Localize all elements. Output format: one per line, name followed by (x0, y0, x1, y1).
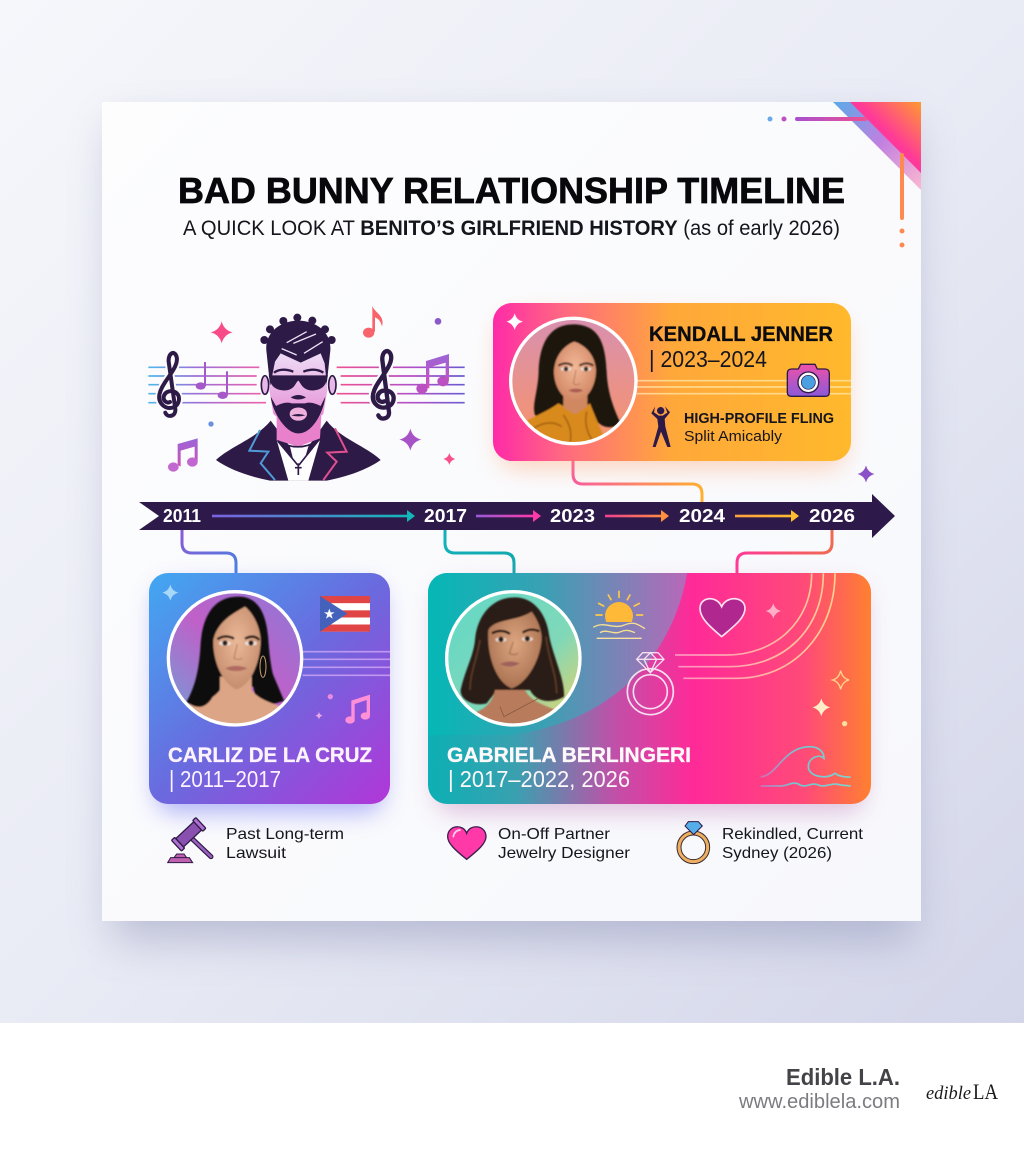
arrow 2023 to 2024 (605, 510, 669, 522)
main white panel (102, 102, 921, 921)
caption: Gabriela partner: Jewelry Designer (498, 845, 631, 862)
connector: 2026 to Gabriela (737, 530, 832, 573)
right treble clef (373, 351, 394, 419)
note: split: Split Amicably (684, 428, 783, 445)
portrait: Gabriela (448, 593, 578, 724)
title: BAD BUNNY RELATIONSHIP TIMELINE (178, 170, 845, 211)
double note heads lower left (168, 457, 198, 472)
nose (291, 395, 306, 399)
footer logo (926, 1079, 998, 1104)
connector: 2023 to Kendall (573, 461, 702, 502)
right music staff (337, 367, 465, 403)
panel: Gabriela Berlingeri (427, 572, 871, 862)
left treble clef (159, 353, 179, 416)
dates: Carliz: | 2011–2017 (169, 766, 281, 792)
sunglasses (269, 375, 328, 390)
icon: heart (700, 599, 745, 637)
year 2023: 2023 (550, 506, 595, 526)
note: fling: HIGH-PROFILE FLING (684, 411, 834, 427)
red note (372, 306, 383, 332)
dates: Gabriela: | 2017–2022, 2026 (448, 766, 630, 792)
caption: Gabriela partner: On-Off Partner (498, 826, 611, 843)
illustration: Benito portrait with music staves (148, 306, 465, 481)
dates: Kendall: | 2023–2024 (649, 346, 767, 372)
caption: Carliz: Lawsuit (226, 845, 287, 862)
decorative lines (637, 381, 851, 394)
timeline arrow (139, 494, 895, 538)
portrait ring (447, 592, 580, 725)
sparkle (506, 313, 523, 330)
mouth (290, 407, 307, 421)
caption: Carliz (226, 826, 344, 862)
connector: 2017 to Gabriela (445, 530, 514, 573)
caption: Gabriela current (722, 826, 864, 862)
sparkle (162, 585, 178, 601)
year 2011: 2011 (163, 506, 201, 526)
small decorations (315, 694, 333, 719)
card shadow (112, 125, 912, 940)
double note lower left (178, 438, 198, 467)
year 2017: 2017 (424, 506, 467, 526)
sparkle right of Kendall card (858, 466, 874, 482)
subtitle: A QUICK LOOK AT BENITO’S GIRLFRIEND HISTORY (as of early 2026) (183, 217, 840, 240)
caption: Carliz: Past Long-term (226, 826, 344, 843)
red note head (363, 328, 374, 338)
double note heads right (416, 376, 449, 394)
necklace (277, 440, 319, 475)
icon: heart small (448, 827, 486, 859)
face (269, 353, 327, 434)
lapel right (323, 428, 347, 480)
corner decoration (768, 102, 921, 248)
beard (271, 397, 325, 433)
footer logo: LA (973, 1079, 998, 1104)
double note right (426, 354, 449, 388)
icon: camera (787, 364, 829, 396)
caption: Gabriela partner (498, 826, 631, 862)
hair (266, 321, 330, 385)
sparkles (766, 603, 849, 726)
hair highlights (282, 332, 323, 355)
icon: ring (627, 653, 673, 715)
footer credit (738, 1064, 900, 1113)
portrait ring (168, 592, 302, 725)
year 2024: 2024 (679, 506, 725, 526)
moustache (287, 405, 309, 416)
name: Carliz: CARLIZ DE LA CRUZ (168, 744, 372, 767)
lapels (249, 430, 275, 480)
arrow 2011 to 2017 (212, 510, 415, 522)
neck (277, 410, 322, 447)
icon: Puerto Rico flag (320, 596, 370, 632)
jacket (216, 421, 381, 481)
connector: 2011 to Carliz (182, 530, 236, 573)
icon: gavel (168, 818, 211, 863)
caption: Gabriela current: Rekindled, Current (722, 826, 864, 843)
ears (261, 376, 336, 394)
staff notes (196, 362, 228, 399)
icon: sunset (593, 591, 645, 638)
icon: wave (761, 747, 851, 786)
footer strip (0, 1023, 1024, 1154)
portrait: Carliz (170, 593, 300, 724)
decorative curves (675, 573, 835, 678)
panel: Carliz de la Cruz (149, 573, 390, 863)
footer credit: Edible L.A. (786, 1064, 900, 1090)
hair twists (260, 314, 336, 344)
panel: Kendall Jenner (493, 303, 851, 469)
sparkles (208, 318, 455, 465)
eyebrows (274, 370, 323, 373)
arrow 2017 to 2023 (476, 510, 541, 522)
icon: diamond ring (679, 822, 708, 862)
decorative lines (303, 652, 390, 675)
icon: dancing figure (651, 406, 671, 447)
shirt (277, 440, 320, 481)
icon: music note (345, 695, 370, 724)
year 2026: 2026 (809, 506, 855, 526)
caption: Gabriela current: Sydney (2026) (722, 845, 832, 862)
arrow 2024 to 2026 (735, 510, 799, 522)
portrait: Kendall (510, 318, 637, 447)
footer logo: edible (926, 1083, 971, 1104)
left music staff (148, 367, 266, 403)
name: Gabriela: GABRIELA BERLINGERI (447, 744, 691, 767)
portrait ring (511, 318, 636, 444)
name: Kendall: KENDALL JENNER (649, 323, 833, 346)
footer credit: www.ediblela.com (738, 1091, 900, 1113)
curved overlay (427, 572, 687, 735)
